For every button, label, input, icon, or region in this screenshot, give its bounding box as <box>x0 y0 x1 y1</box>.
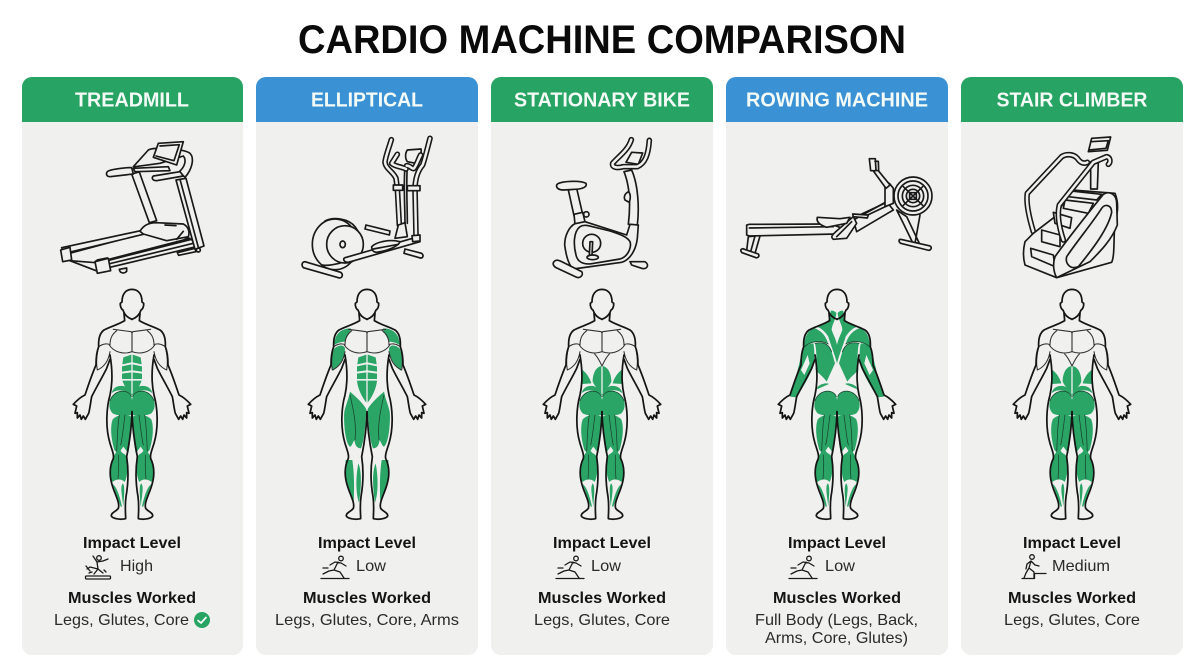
muscles list: Legs, Glutes, Core, Arms <box>275 612 459 629</box>
icon: low impact runner <box>321 556 349 578</box>
impact value: High <box>120 558 153 575</box>
impact heading: Impact Level <box>318 535 416 552</box>
muscles list: Legs, Glutes, Core <box>1004 612 1140 629</box>
body diagram: stair climber muscles <box>1013 289 1131 519</box>
impact heading: Impact Level <box>788 535 886 552</box>
panel: elliptical <box>256 77 478 655</box>
muscles list: Legs, Glutes, Core <box>54 612 189 629</box>
panel: stair climber <box>961 77 1183 655</box>
panel: rowing machine <box>726 77 948 655</box>
impact heading: Impact Level <box>83 535 181 552</box>
muscles list: Full Body (Legs, Back, <box>755 612 918 629</box>
impact value: Low <box>591 558 621 575</box>
impact value: Medium <box>1052 558 1110 575</box>
muscles list: Legs, Glutes, Core <box>534 612 670 629</box>
impact value: Low <box>356 558 386 575</box>
icon: high impact <box>86 556 110 579</box>
header: treadmill: TREADMILL <box>75 90 189 112</box>
muscles heading: Muscles Worked <box>773 590 901 607</box>
icon: elliptical machine <box>302 138 430 278</box>
icon: low impact runner <box>789 556 817 578</box>
header: stationary bike: STATIONARY BIKE <box>514 90 690 112</box>
header: rowing machine <box>726 77 948 122</box>
header: treadmill <box>22 77 243 122</box>
header: rowing machine: ROWING MACHINE <box>746 90 928 112</box>
impact heading: Impact Level <box>553 535 651 552</box>
icon: rowing machine <box>741 159 932 258</box>
muscles list continued: Arms, Core, Glutes) <box>765 630 908 647</box>
panel: stationary bike <box>491 77 713 655</box>
muscles heading: Muscles Worked <box>303 590 431 607</box>
body diagram: rowing back muscles <box>778 289 896 519</box>
icon: low impact runner <box>556 556 584 578</box>
icon: check badge <box>194 612 210 628</box>
header: elliptical <box>256 77 478 122</box>
body diagram: elliptical muscles <box>308 289 426 519</box>
header: elliptical: ELLIPTICAL <box>311 90 423 112</box>
body diagram: treadmill muscles <box>73 289 191 519</box>
icon: medium impact stairs <box>1022 555 1046 578</box>
panel: treadmill <box>22 77 243 655</box>
icon: stationary bike machine <box>553 140 649 278</box>
header: stair climber: STAIR CLIMBER <box>996 90 1148 112</box>
impact heading: Impact Level <box>1023 535 1121 552</box>
muscles heading: Muscles Worked <box>68 590 196 607</box>
icon: stair climber machine <box>1023 137 1117 278</box>
header: stair climber <box>961 77 1183 122</box>
muscles heading: Muscles Worked <box>538 590 666 607</box>
header: stationary bike <box>491 77 713 122</box>
body diagram: bike muscles <box>543 289 661 519</box>
icon: treadmill machine <box>61 142 204 273</box>
muscles heading: Muscles Worked <box>1008 590 1136 607</box>
impact value: Low <box>825 558 855 575</box>
title: CARDIO MACHINE COMPARISON <box>298 18 906 62</box>
